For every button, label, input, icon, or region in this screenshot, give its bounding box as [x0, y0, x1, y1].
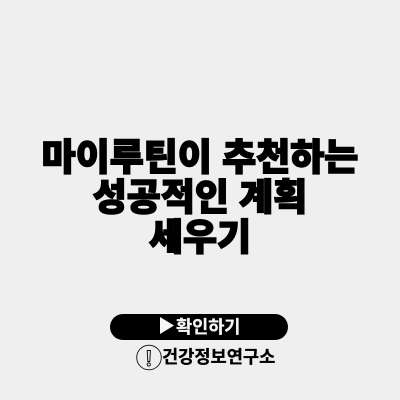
icon: play triangle [160, 317, 174, 334]
source logo [136, 344, 275, 370]
title [42, 137, 358, 258]
title line 1: 마이루틴이 추천하는 [42, 137, 358, 178]
title line 3: 세우기 [149, 217, 251, 258]
button label: 확인하기 [176, 317, 240, 337]
button: confirm [110, 314, 288, 340]
title line 2: 성공적인 계획 [93, 177, 307, 218]
source name: 건강정보연구소 [162, 347, 275, 367]
icon: exclamation circle [136, 344, 162, 370]
